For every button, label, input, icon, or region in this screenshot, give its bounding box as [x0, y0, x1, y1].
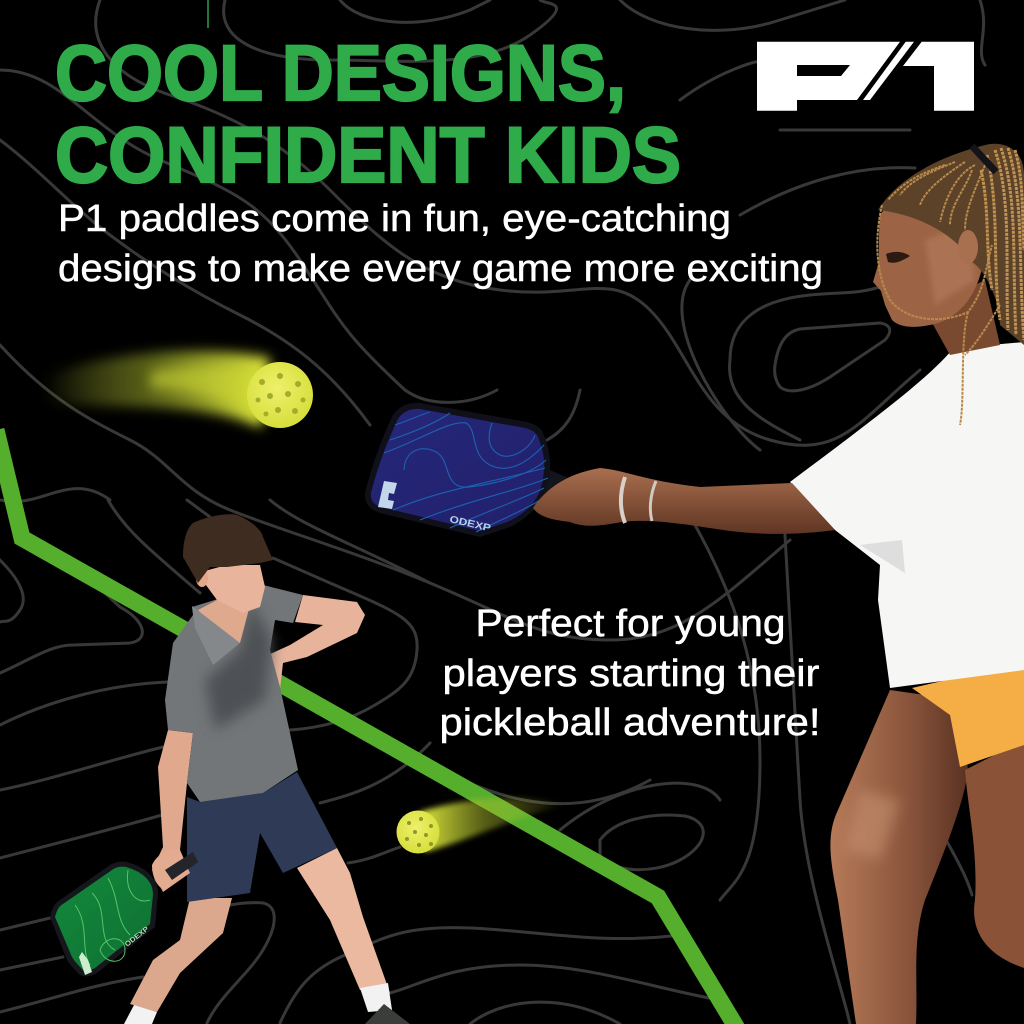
- green diagonal stripe: [0, 430, 738, 1024]
- neck and collar: [198, 600, 250, 643]
- bracelets: [621, 477, 625, 523]
- socks and shoes: [124, 1005, 157, 1024]
- blue paddle: [365, 403, 577, 537]
- blue paddle: ODEXP: [448, 514, 492, 534]
- white shirt: [790, 342, 1024, 688]
- legs: [830, 690, 968, 1024]
- grey polo shirt: [165, 585, 303, 802]
- eye: [886, 252, 910, 263]
- ear: [958, 230, 978, 264]
- callout text: [440, 603, 820, 744]
- braided hair: [878, 144, 1024, 345]
- small pickleball with trail: [396, 798, 565, 854]
- face: [197, 565, 265, 613]
- callout text: players starting their: [442, 653, 820, 695]
- hand on grip: [152, 850, 188, 890]
- callout text: Perfect for young: [476, 603, 786, 645]
- navy shorts: [187, 772, 337, 902]
- heading: CONFIDENT KIDS: [55, 110, 681, 199]
- face: [873, 190, 985, 327]
- large pickleball with trail: [45, 351, 313, 428]
- orange shorts: [912, 662, 1024, 767]
- logo: P1: [757, 42, 974, 111]
- left leg: [130, 898, 232, 1012]
- left arm: [152, 730, 193, 892]
- green paddle: ODEXP: [124, 926, 151, 949]
- subheading: [58, 198, 823, 290]
- heading: COOL DESIGNS,: [55, 28, 626, 117]
- subheading: designs to make every game more exciting: [58, 248, 823, 290]
- right leg: [297, 848, 390, 993]
- neck: [925, 280, 1000, 355]
- girl player: [533, 144, 1024, 1024]
- boy player: [50, 514, 410, 1024]
- subheading: P1 paddles come in fun, eye-catching: [58, 198, 731, 240]
- callout text: pickleball adventure!: [440, 702, 820, 744]
- hair: [183, 514, 273, 583]
- heading: [55, 28, 681, 199]
- arm and hand: [533, 468, 835, 534]
- green paddle: [50, 852, 198, 976]
- right arm and hand: [260, 595, 365, 690]
